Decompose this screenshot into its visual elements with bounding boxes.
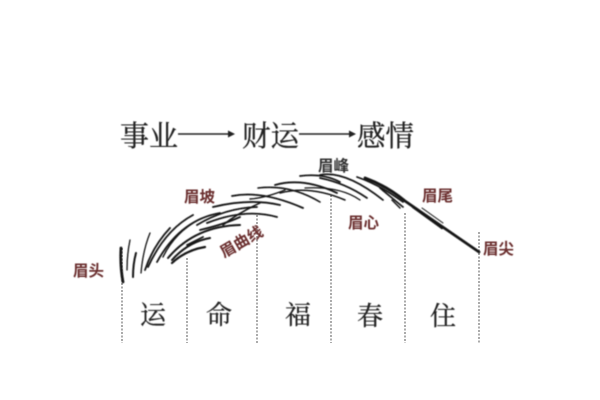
label: brow peak: 眉峰: [318, 157, 350, 175]
title: career, wealth, emotion flow: 财运: [242, 120, 300, 153]
eyebrow part labels: [73, 157, 514, 280]
label: brow head: 眉头: [73, 262, 104, 280]
character: luck: 运: [140, 301, 167, 330]
label: brow center: 眉心: [348, 214, 380, 232]
label: brow tail: 眉尾: [422, 188, 453, 205]
label: brow tip: 眉尖: [483, 240, 514, 258]
label: brow curve line: 眉曲线: [217, 222, 267, 261]
character: dwelling: 住: [430, 302, 456, 331]
label: brow slope: 眉坡: [184, 188, 216, 206]
title: career, wealth, emotion flow: 感情: [357, 120, 414, 153]
character: spring: 春: [357, 302, 383, 331]
character: fortune: 福: [285, 301, 311, 330]
bottom row characters: [140, 301, 456, 331]
title: career, wealth, emotion flow: 事业: [120, 120, 178, 153]
eyebrow hair strokes: [121, 174, 479, 282]
title: career, wealth, emotion flow: [120, 120, 414, 153]
character: fate: 命: [206, 301, 232, 330]
